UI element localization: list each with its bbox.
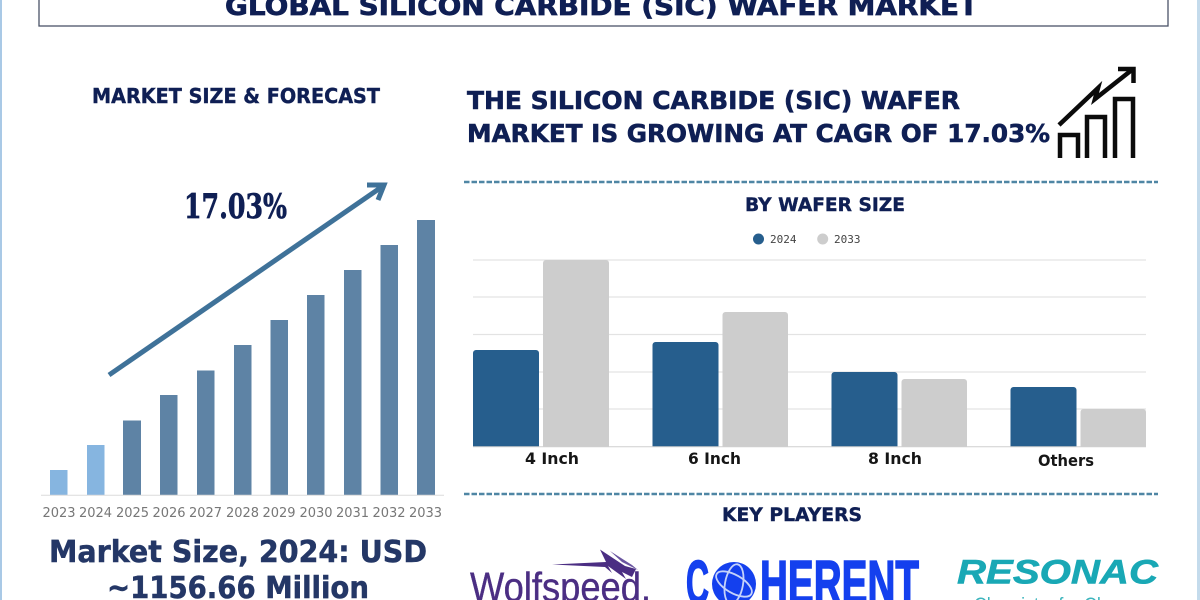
CAGR headline bbox=[467, 86, 1050, 148]
bar chart: market size by year: 2033 bbox=[409, 506, 442, 521]
bar chart: market size by year: 2028 bbox=[226, 506, 259, 521]
heading: market size and forecast: MARKET SIZE & FORECAST bbox=[92, 84, 380, 108]
heading: by wafer size: BY WAFER SIZE bbox=[745, 194, 905, 216]
market size callout: Market Size, 2024: USD bbox=[49, 535, 427, 570]
bar chart: market size by year: 2029 bbox=[262, 506, 296, 521]
bar chart: market size by year: 2024 bbox=[79, 506, 112, 521]
logo: Resonac bbox=[957, 554, 1159, 600]
logo: Coherent bbox=[686, 549, 919, 600]
CAGR headline: THE SILICON CARBIDE (SIC) WAFER bbox=[467, 86, 960, 115]
bar chart: market size by year bbox=[41, 220, 444, 521]
grouped bar chart: 8 Inch bbox=[868, 449, 922, 468]
panel: by wafer size bbox=[473, 194, 1146, 470]
grouped bar chart: 4 Inch bbox=[525, 449, 579, 468]
bar chart: market size by year: 2031 bbox=[336, 506, 369, 521]
growth arrow bbox=[109, 185, 384, 375]
logo: Resonac: RESONAC bbox=[957, 554, 1159, 592]
panel: market size and forecast bbox=[41, 84, 444, 600]
heading: key players: KEY PLAYERS bbox=[722, 504, 862, 526]
legend bbox=[753, 233, 860, 246]
legend: 2033 bbox=[834, 233, 860, 246]
bar chart: market size by year: 2030 bbox=[299, 506, 333, 521]
title banner bbox=[39, 0, 1168, 26]
grouped bar chart bbox=[473, 260, 1146, 470]
bar chart: market size by year: 2032 bbox=[372, 506, 406, 521]
logo: Wolfspeed bbox=[470, 550, 651, 600]
legend: 2024 bbox=[770, 233, 797, 246]
icon: growth chart bbox=[1059, 69, 1134, 158]
bar chart: market size by year: 2026 bbox=[152, 506, 186, 521]
CAGR value: 17.03% bbox=[184, 187, 287, 227]
grouped bar chart: Others bbox=[1038, 451, 1094, 470]
bar chart: market size by year: 2025 bbox=[116, 506, 149, 521]
bar chart: market size by year: 2027 bbox=[189, 506, 222, 521]
grouped bar chart: 6 Inch bbox=[688, 449, 741, 468]
bar chart: market size by year: 2023 bbox=[42, 506, 76, 521]
panel: key players bbox=[470, 504, 1159, 600]
market size callout bbox=[49, 535, 427, 600]
CAGR headline: MARKET IS GROWING AT CAGR OF 17.03% bbox=[467, 119, 1050, 148]
